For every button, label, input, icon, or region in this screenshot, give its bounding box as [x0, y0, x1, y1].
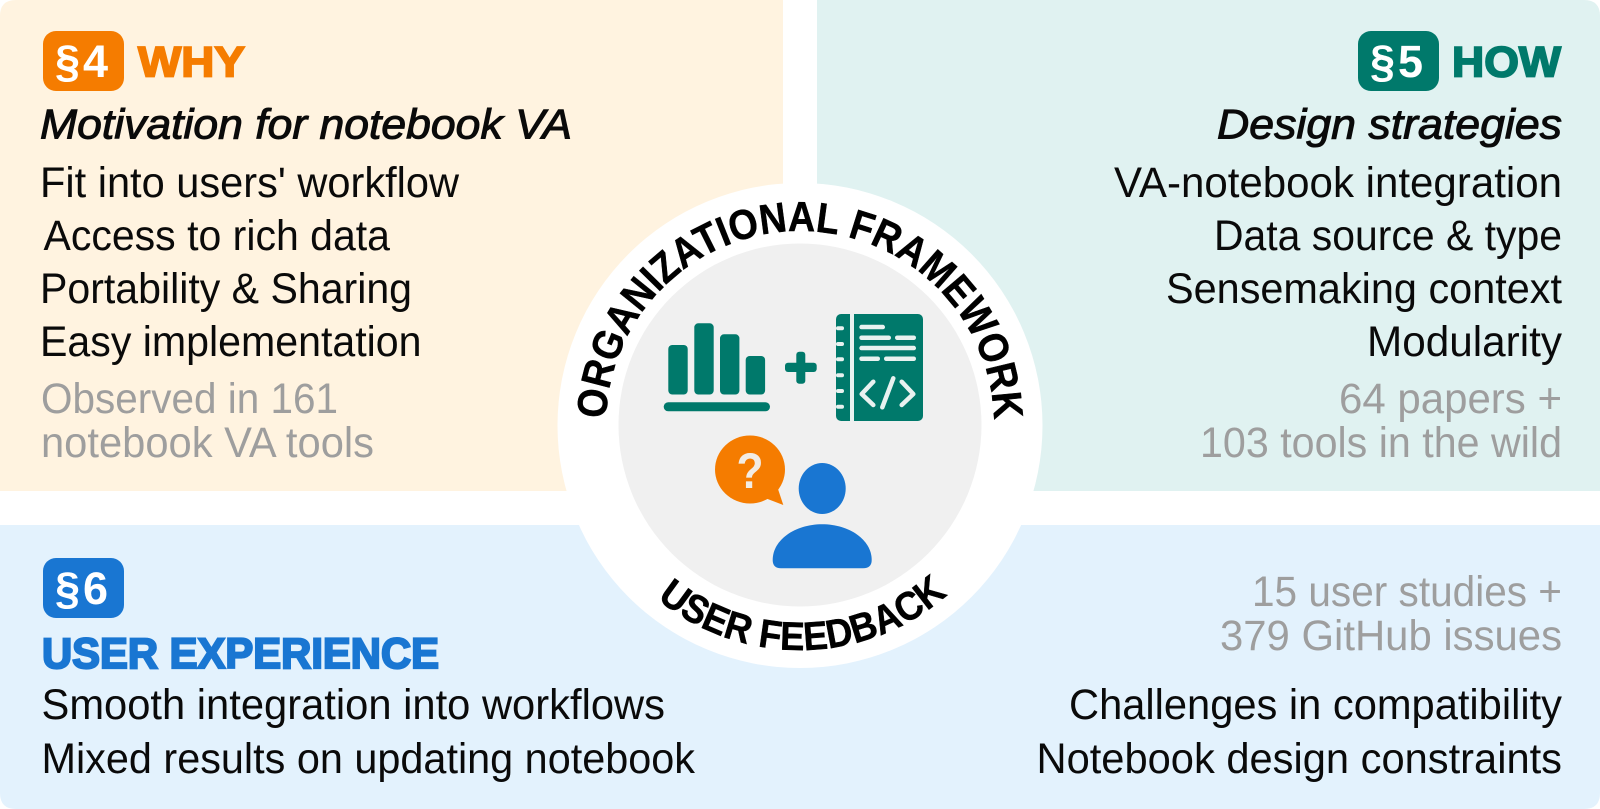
- curved label: organizational framework: ORGANIZATIONAL FRAMEWORK: [578, 202, 1024, 420]
- list: positive results: Mixed results on updating notebook: [42, 736, 696, 783]
- panel: user experience: [0, 525, 1600, 809]
- list: strategies: VA-notebook integration: [1114, 160, 1562, 207]
- subtitle: design strategies: Design strategies: [1217, 100, 1562, 148]
- list: challenges: [1036, 682, 1563, 783]
- icon: bar chart: [664, 323, 770, 411]
- icon: plus: [785, 352, 817, 384]
- list: strategies: Data source & type: [1214, 213, 1562, 260]
- note: papers and tools: 64 papers +: [1339, 376, 1562, 423]
- badge: section 5: §5: [1370, 36, 1426, 87]
- note: papers and tools: [1200, 376, 1562, 467]
- note: observed tools: notebook VA tools: [41, 420, 374, 467]
- note: observed tools: [41, 376, 374, 467]
- list: strategies: Sensemaking context: [1166, 266, 1562, 313]
- note: studies and issues: 379 GitHub issues: [1220, 613, 1562, 660]
- list: motivations: Easy implementation: [40, 319, 422, 366]
- badge: section 5: [1358, 31, 1439, 91]
- heading: how: HOW: [1452, 40, 1562, 86]
- list: motivations: Portability & Sharing: [40, 266, 412, 313]
- badge: section 4: §4: [55, 36, 111, 87]
- curved label: user feedback: USER FEEDBACK: [662, 573, 948, 650]
- note: studies and issues: [1220, 569, 1562, 660]
- heading: user experience: USER EXPERIENCE: [42, 630, 439, 678]
- list: positive results: Smooth integration into workflows: [42, 682, 665, 729]
- note: observed tools: Observed in 161: [41, 376, 338, 423]
- list: strategies: [1114, 160, 1563, 366]
- central badge: [558, 184, 1042, 668]
- list: strategies: Modularity: [1367, 319, 1563, 366]
- heading: why: WHY: [138, 40, 245, 86]
- panel background: user experience: [0, 525, 1600, 809]
- badge: section 6: §6: [55, 563, 111, 614]
- badge: section 6: [43, 558, 124, 618]
- list: motivations: Fit into users' workflow: [40, 160, 459, 207]
- badge: section 4: [43, 31, 124, 91]
- list: challenges: Challenges in compatibility: [1069, 682, 1563, 729]
- list: motivations: Access to rich data: [44, 213, 390, 260]
- panel background: how: [817, 0, 1600, 491]
- panel background: why: [0, 0, 783, 491]
- list: challenges: Notebook design constraints: [1036, 736, 1562, 783]
- outer white ring: [558, 183, 1042, 668]
- note: studies and issues: 15 user studies +: [1252, 569, 1562, 616]
- subtitle: motivation: Motivation for notebook VA: [40, 100, 572, 148]
- inner grey disc: [618, 244, 982, 606]
- icon: person: [773, 463, 872, 568]
- panel: why: [0, 0, 783, 491]
- list: positive results: [42, 682, 696, 783]
- icon: question bubble: ?: [736, 443, 764, 499]
- icon: code notebook: [836, 314, 923, 421]
- note: papers and tools: 103 tools in the wild: [1200, 420, 1562, 467]
- icon: question bubble: [715, 436, 785, 505]
- panel: how: [817, 0, 1600, 491]
- list: motivations: [40, 160, 459, 366]
